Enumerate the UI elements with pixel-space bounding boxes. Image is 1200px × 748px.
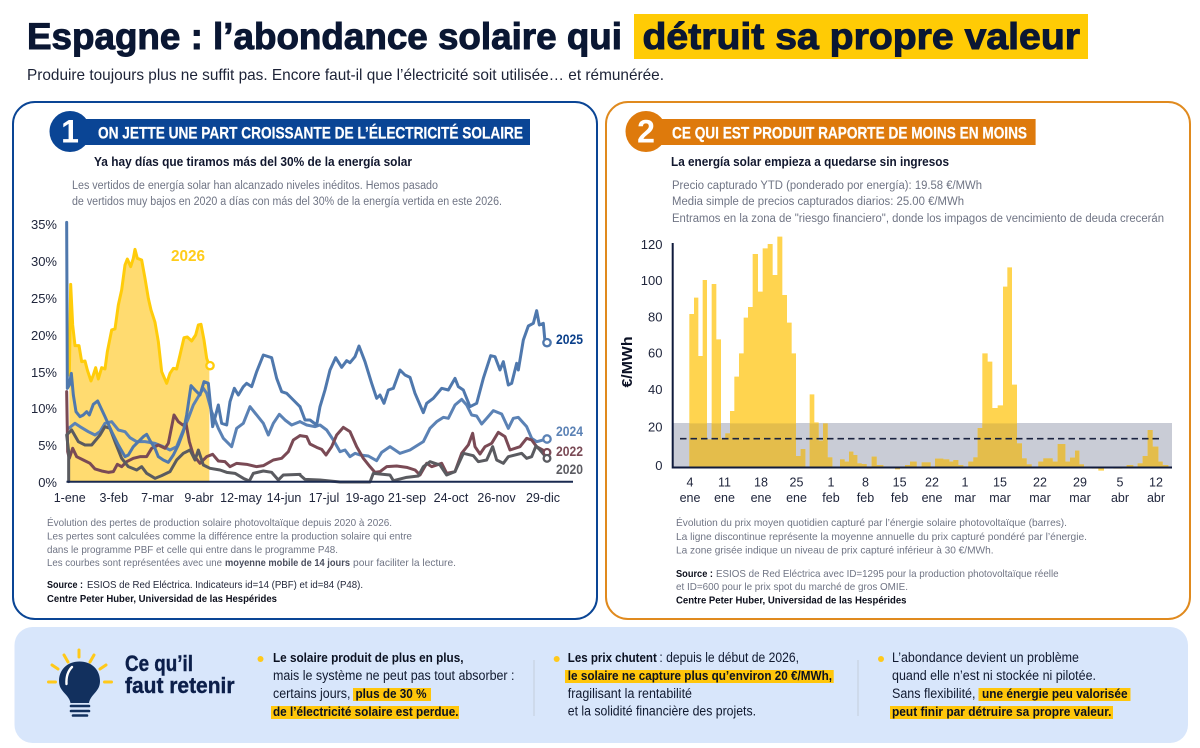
y axis labels: 60 [648, 346, 662, 360]
panel 2 source: Source : [676, 568, 713, 580]
icon: light bulb [48, 650, 112, 716]
x axis labels: mar [989, 491, 1011, 505]
x axis labels: 25 [790, 476, 803, 490]
takeaway 3: Sans flexibilité, [892, 686, 976, 701]
panel 1 source: ESIOS de Red Eléctrica. Indicateurs id=14 (PBF) et id=84 (P48). [87, 579, 363, 591]
panel 1 caption: Évolution des pertes de production solaire photovoltaïque depuis 2020 à 2026. [47, 516, 392, 529]
2022 line [67, 392, 547, 475]
x axis labels: 1-ene [54, 491, 86, 505]
takeaway 2 [554, 650, 834, 718]
x axis labels: ene [714, 491, 735, 505]
x axis labels: 18 [754, 476, 768, 490]
panel 2 header: CE QUI EST PRODUIT RAPORTE DE MOINS EN MOINS [672, 124, 1027, 142]
x axis labels: 5 [1117, 476, 1124, 490]
x axis labels: 12-may [220, 491, 263, 505]
y axis labels [31, 217, 57, 490]
panel 1 intro text: de vertidos muy bajos en 2020 a días con más del 30% de la energía vertida en este 2026. [72, 196, 502, 208]
x axis labels: 12 [1149, 476, 1163, 490]
panel 1 header: 1 [61, 114, 79, 150]
x axis labels: mar [1029, 491, 1051, 505]
y axis labels: 120 [641, 237, 662, 252]
x axis labels [54, 491, 560, 505]
panel 2 caption: La ligne discontinue représente la moyenne annuelle du prix capturé pondéré par l’énergie. [676, 531, 1087, 543]
x axis labels: 3-feb [100, 491, 128, 505]
divider [533, 660, 535, 716]
y axis labels: 35% [31, 217, 57, 232]
x axis labels: ene [922, 491, 942, 505]
x axis labels: 22 [925, 476, 939, 490]
takeaway 2: le solaire ne capture plus qu’environ 20 €/MWh, [568, 668, 832, 683]
x axis labels: 29-dic [526, 491, 560, 505]
y axis labels: 25% [31, 291, 57, 306]
series lines [67, 222, 551, 482]
panel 1 source: Source : [47, 579, 83, 591]
y axis title: €/MWh [620, 336, 636, 388]
x axis labels: 19-ago [346, 491, 385, 505]
axes [673, 243, 1172, 468]
panel 2 header [626, 111, 1036, 152]
panel 1 caption: moyenne mobile de 14 jours [225, 557, 350, 569]
y axis labels: 20% [31, 328, 57, 343]
panel 2 source [676, 568, 1059, 606]
x axis labels: 8 [862, 476, 869, 490]
2026 line [69, 249, 209, 383]
x axis labels: 17-jul [309, 491, 339, 505]
panel 1: curtailment [13, 102, 597, 619]
takeaway 2: : depuis le début de 2026, [659, 650, 799, 665]
x axis labels: ene [786, 491, 807, 505]
takeaways band [14, 627, 1188, 743]
y axis labels: 80 [648, 310, 662, 324]
y axis labels: 15% [31, 365, 57, 380]
panel 2 key figures [672, 180, 1164, 225]
takeaway 2: Les prix chutent [568, 650, 657, 665]
panel 1 header [50, 111, 530, 152]
takeaway 3: une énergie peu valorisée [982, 686, 1128, 701]
2026 area [69, 249, 209, 482]
y axis labels: 10% [31, 401, 57, 416]
panel 1 source [47, 579, 363, 605]
takeaway 3: L’abondance devient un problème [892, 650, 1079, 665]
y axis labels: 30% [31, 254, 57, 269]
takeaway 1: mais le système ne peut pas tout absorber : [273, 668, 514, 683]
panel 1 caption: pour faciliter la lecture. [353, 557, 456, 569]
panel 1 caption: Les courbes sont représentées avec une [47, 557, 222, 569]
y axis labels: 40 [648, 382, 662, 397]
x axis labels: 1 [962, 476, 969, 490]
daily bars [689, 237, 1168, 471]
year labels [171, 248, 583, 477]
x axis labels: feb [891, 491, 908, 505]
panel 2 caption [676, 516, 1087, 556]
x axis labels: 26-nov [477, 491, 516, 505]
takeaways heading: faut retenir [125, 673, 235, 698]
panel 1 intro text: Les vertidos de energía solar han alcanzado niveles inéditos. Hemos pasado [72, 180, 438, 192]
y axis labels: 100 [641, 273, 662, 288]
subtitle: Produire toujours plus ne suffit pas. Encore faut-il que l’électricité soit utilisée… et rémunérée. [27, 67, 664, 84]
x axis labels: mar [1069, 491, 1091, 505]
takeaways heading [125, 651, 235, 698]
divider [857, 660, 859, 716]
title [27, 14, 1088, 59]
panel 2 source: ESIOS de Red Eléctrica avec ID=1295 pour la production photovoltaïque réelle [716, 568, 1059, 580]
panel 1 caption: Les pertes sont calculées comme la différence entre la production solaire qui entre [47, 530, 412, 542]
x axis labels: 29 [1073, 476, 1087, 490]
panel 2 header: 2 [637, 114, 655, 150]
takeaway 1 [258, 650, 514, 719]
panel 2 caption: La zone grisée indique un niveau de prix capturé inférieur à 30 €/MWh. [676, 544, 994, 556]
takeaway 2: et la solidité financière des projets. [568, 704, 756, 718]
x axis labels: 24-oct [434, 491, 469, 505]
panel 2 caption: Évolution du prix moyen quotidien capturé par l’énergie solaire photovoltaïque (barres). [676, 516, 1067, 529]
panel 1 source: Centre Peter Huber, Universidad de las Hespérides [47, 593, 277, 605]
x axis labels [680, 476, 1165, 505]
x axis labels: 22 [1033, 476, 1047, 490]
x axis labels: 4 [687, 476, 694, 490]
x axis labels: abr [1111, 491, 1129, 505]
takeaway 3 [878, 650, 1130, 719]
x axis labels: 21-sep [388, 491, 426, 505]
y axis labels: 20 [648, 420, 662, 434]
panel 2 key figures: Entramos en la zona de "riesgo financiero", donde los impagos de vencimiento de deuda crecerán [672, 213, 1164, 225]
title: détruit sa propre valeur [642, 16, 1080, 57]
panel 2 source: et ID=600 pour le prix spot du marché de gros OMIE. [676, 581, 908, 593]
2025 line [67, 222, 545, 462]
x axis labels: 15 [993, 476, 1007, 490]
x axis labels: 11 [718, 476, 731, 490]
y axis labels [641, 237, 662, 473]
x axis labels: abr [1147, 491, 1165, 505]
takeaway 3: quand elle n’est ni stockée ni pilotée. [892, 668, 1096, 683]
2024 line [69, 388, 547, 461]
2020 line [67, 427, 547, 482]
takeaway 1: Le solaire produit de plus en plus, [273, 650, 464, 665]
axes [66, 481, 573, 483]
x axis labels: 1 [828, 476, 835, 490]
panel 2 source: Centre Peter Huber, Universidad de las Hespérides [676, 594, 907, 606]
x axis labels: 14-jun [267, 491, 301, 505]
x axis labels: ene [680, 491, 700, 505]
end markers [206, 339, 551, 462]
x axis labels: ene [751, 491, 771, 505]
title: Espagne : l’abondance solaire qui [27, 16, 622, 57]
y axis labels: 0% [38, 475, 57, 490]
takeaway 1: de l’électricité solaire est perdue. [273, 704, 458, 719]
panel 2 key figures: Media simple de precios capturados diarios: 25.00 €/MWh [672, 196, 964, 208]
year labels: 2024 [556, 423, 583, 439]
panel 1 intro text [72, 180, 502, 208]
y axis labels: 5% [38, 438, 57, 453]
year labels: 2022 [556, 443, 583, 459]
x axis labels: mar [954, 491, 976, 505]
panel 1 subheading: Ya hay días que tiramos más del 30% de la energía solar [94, 155, 412, 169]
panel 1 caption [47, 516, 456, 569]
panel 2: captured price [606, 102, 1190, 619]
panel 2 subheading: La energía solar empieza a quedarse sin ingresos [671, 155, 949, 169]
panel 1 header: ON JETTE UNE PART CROISSANTE DE L’ÉLECTRICITÉ SOLAIRE [98, 124, 523, 142]
dashed mean line [680, 438, 1163, 440]
takeaway 2: fragilisant la rentabilité [568, 686, 692, 701]
takeaway 1: certains jours, [273, 686, 350, 701]
takeaways heading: Ce qu’il [125, 651, 193, 676]
year labels: 2025 [556, 331, 583, 347]
year labels: 2020 [556, 461, 583, 477]
x axis labels: 15 [893, 476, 907, 490]
line chart: solar curtailment by year [31, 217, 583, 505]
x axis labels: 7-mar [141, 491, 174, 505]
grey low-price zone [673, 423, 1172, 467]
panel 1 caption: dans le programme PBF et celle qui entre dans le programme P48. [47, 544, 338, 556]
takeaway 3: peut finir par détruire sa propre valeur. [892, 704, 1112, 719]
x axis labels: feb [857, 491, 874, 505]
bar chart: daily captured price [620, 237, 1172, 505]
y axis labels: 0 [655, 458, 662, 473]
takeaway 1: plus de 30 % [356, 686, 427, 701]
x axis labels: feb [822, 491, 840, 505]
year labels: 2026 [171, 248, 205, 265]
x axis labels: 9-abr [184, 491, 214, 505]
panel 2 key figures: Precio capturado YTD (ponderado por energía): 19.58 €/MWh [672, 180, 982, 192]
